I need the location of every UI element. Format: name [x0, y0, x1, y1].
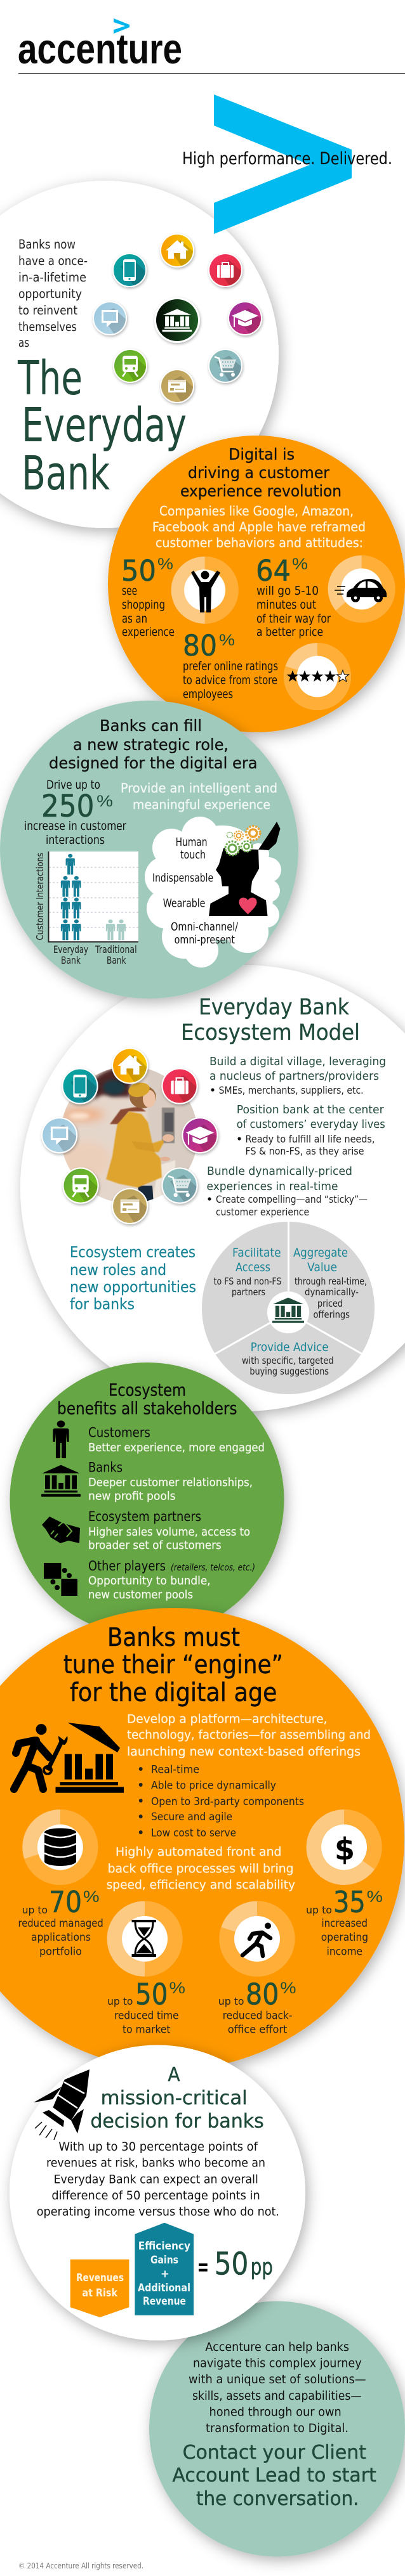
- teal callout: new opportunities: [70, 1278, 196, 1296]
- donut with dollar: [314, 1817, 375, 1877]
- item: ecosystem partners: broader set of customers: [88, 1539, 222, 1552]
- panel: ecosystem benefits: [10, 1362, 284, 1636]
- item: ecosystem partners: Ecosystem partners: [88, 1509, 201, 1524]
- donut with database: [30, 1817, 91, 1877]
- stat 70 percent: reduced managed: [18, 1917, 103, 1929]
- body text: revenues at risk, banks who become an: [46, 2156, 265, 2170]
- main title: Everyday: [22, 398, 187, 453]
- stat 80 percent: 80: [183, 629, 217, 663]
- contact text: Account Lead to start: [172, 2464, 376, 2487]
- item: other players: Other players: [88, 1558, 166, 1574]
- text: position bank at the center: FS & non-FS, as they arise: [245, 1145, 364, 1157]
- body text: transformation to Digital.: [206, 2422, 349, 2435]
- contact text: Contact your Client: [183, 2442, 366, 2464]
- subheading: meaningful experience: [133, 797, 270, 812]
- subheading: [152, 503, 366, 550]
- panel: mission-critical decision: [10, 2045, 305, 2341]
- main title: [17, 351, 187, 501]
- body text: Accenture can help banks: [205, 2341, 349, 2354]
- bullet list: Low cost to serve: [151, 1827, 236, 1839]
- heading: Digital is: [229, 445, 295, 463]
- heading: mission-critical: [101, 2087, 248, 2109]
- facilitate access: to FS and non-FS: [213, 1276, 282, 1287]
- stat 35 percent: increased: [321, 1917, 368, 1929]
- item: banks: Deeper customer relationships,: [88, 1476, 253, 1489]
- stat 50 percent: %: [157, 555, 173, 573]
- heading: for the digital age: [70, 1678, 277, 1707]
- subheading: Companies like Google, Amazon,: [159, 503, 354, 519]
- stat 50 percent: [121, 554, 232, 639]
- item: other players: Opportunity to bundle,: [88, 1574, 211, 1588]
- subheading: automation: Highly automated front and: [116, 1846, 282, 1859]
- box: efficiency gains plus additional revenue: [135, 2223, 194, 2315]
- bullet list: Secure and agile: [151, 1811, 232, 1823]
- icon: rocket: [34, 2069, 90, 2140]
- heading: [49, 716, 258, 772]
- provide advice: [242, 1340, 334, 1377]
- panel: contact call to action: [149, 2301, 405, 2556]
- heart: [239, 898, 257, 914]
- heading: [57, 1381, 237, 1419]
- intro text: Banks now: [18, 237, 76, 252]
- subheading: automation: back office processes will bring: [108, 1863, 294, 1875]
- stat 35 percent: income: [327, 1945, 362, 1957]
- stat 50 percent: 50: [121, 554, 156, 588]
- stat 64 percent: 64: [256, 554, 291, 588]
- text: position bank at the center: of customers’ everyday lives: [237, 1118, 385, 1131]
- heading: Ecosystem: [109, 1381, 186, 1401]
- main title: Bank: [22, 446, 110, 501]
- stat 70 percent: portfolio: [39, 1945, 82, 1957]
- text: position bank at the center: Position bank at the center: [237, 1103, 384, 1116]
- item: ecosystem partners: [42, 1509, 250, 1552]
- text: position bank at the center: [237, 1103, 385, 1157]
- stat 50 percent: %: [169, 1979, 185, 1997]
- subheading: customer behaviors and attitudes:: [156, 535, 363, 550]
- panel: digital revolution: [108, 436, 405, 732]
- stat 80 percent: up to: [218, 1995, 244, 2007]
- donut with car: [335, 562, 388, 616]
- item: other players: new customer pools: [88, 1588, 193, 1602]
- intro text: in-a-lifetime: [18, 270, 86, 285]
- heading: experience revolution: [180, 482, 342, 500]
- category labels: Everyday: [53, 943, 88, 955]
- stat 80 percent: 80: [246, 1977, 279, 2011]
- aggregate value: through real-time,: [295, 1276, 367, 1287]
- stat 64 percent: of their way for: [256, 612, 331, 626]
- stat 50 percent: 50: [135, 1977, 168, 2011]
- text: bundle experiences: experiences in real-time: [207, 1180, 338, 1193]
- box: efficiency gains plus additional revenue: Additional: [138, 2282, 190, 2294]
- stat 50 percent: up to: [107, 1995, 133, 2007]
- teal callout: [70, 1243, 196, 1313]
- stat 35 percent: [306, 1817, 383, 1957]
- body text: skills, assets and capabilities—: [192, 2390, 362, 2403]
- donut with hourglass: [114, 1908, 175, 1969]
- category labels: Bank: [107, 954, 126, 966]
- donut with person: [178, 563, 232, 617]
- donut with stars: [287, 649, 349, 704]
- stat 80 percent: prefer online ratings: [183, 659, 278, 673]
- category labels: Traditional: [95, 943, 137, 955]
- intro text: have a once-: [18, 254, 88, 268]
- teal callout: for banks: [70, 1295, 135, 1313]
- text: build a digital village: SMEs, merchants, suppliers, etc.: [219, 1084, 364, 1096]
- intro text: opportunity: [18, 287, 82, 301]
- box: revenues at risk: at Risk: [82, 2287, 118, 2299]
- subheading: platform: Develop a platform—architecture,: [127, 1713, 328, 1726]
- stat 250 percent: [24, 778, 126, 847]
- text: build a digital village: Build a digital village, leveraging: [209, 1055, 386, 1068]
- heading: tune their “engine”: [63, 1650, 283, 1680]
- aggregate value: priced: [317, 1298, 343, 1309]
- heading: Banks can fill: [100, 716, 202, 735]
- stat 250 percent: %: [96, 793, 113, 810]
- stat 50 percent: to market: [123, 2024, 171, 2035]
- stat 35 percent: up to: [306, 1904, 332, 1916]
- contact text: [172, 2442, 376, 2510]
- panel: new strategic role: [0, 701, 298, 999]
- subheading: platform: technology, factories—for assembling and: [127, 1729, 371, 1742]
- main title: The: [17, 351, 83, 406]
- photo: woman at ATM: [63, 1069, 196, 1201]
- accenture logo: accenture: [18, 25, 182, 73]
- heading: driving a customer: [188, 463, 330, 482]
- item: ecosystem partners: Higher sales volume, access to: [88, 1525, 250, 1539]
- cloud labels: omni-present: [175, 934, 235, 947]
- ring of icons: [41, 1047, 220, 1226]
- cloud labels: Human: [176, 836, 208, 849]
- stat 70 percent: applications: [31, 1931, 91, 1943]
- stat 250 percent: increase in customer: [24, 819, 126, 833]
- teal callout: Ecosystem creates: [70, 1243, 196, 1261]
- box: efficiency gains plus additional revenue: Efficiency: [138, 2240, 190, 2252]
- box: revenues at risk: Revenues: [76, 2272, 124, 2284]
- body text: difference of 50 percentage points in: [51, 2189, 260, 2203]
- item: customers: Customers: [88, 1425, 150, 1440]
- body text: navigate this complex journey: [193, 2357, 362, 2371]
- stat 50 percent: experience: [122, 625, 175, 639]
- text: bundle experiences: Bundle dynamically-priced: [207, 1165, 352, 1178]
- body text: [189, 2341, 366, 2435]
- text: bundle experiences: customer experience: [216, 1206, 309, 1218]
- facilitate access: partners: [232, 1286, 265, 1298]
- text: build a digital village: a nucleus of partners/providers: [209, 1070, 379, 1083]
- item: customers: [53, 1420, 265, 1458]
- aggregate value: dynamically-: [305, 1286, 359, 1298]
- stat 70 percent: up to: [22, 1904, 48, 1916]
- item: other players: [44, 1558, 255, 1602]
- stat 35 percent: operating: [321, 1931, 368, 1943]
- text: build a digital village: [209, 1055, 386, 1096]
- stat 64 percent: [256, 554, 388, 639]
- donut with walker: [227, 1908, 288, 1969]
- icon cluster: [93, 233, 264, 405]
- heading: [181, 995, 360, 1045]
- box: revenues at risk: [70, 2260, 129, 2317]
- stat 80 percent: [218, 1908, 296, 2035]
- stat 70 percent: %: [83, 1888, 100, 1906]
- stat 250 percent: Drive up to: [46, 778, 100, 792]
- bullet list: Real-time: [151, 1764, 199, 1775]
- item: banks: Banks: [88, 1460, 123, 1475]
- subheading: platform: launching new context-based offerings: [127, 1745, 361, 1759]
- result: 50pp: pp: [251, 2255, 273, 2281]
- donut with dollar: $: [335, 1832, 355, 1867]
- heading: [90, 2064, 264, 2133]
- stat 64 percent: minutes out: [256, 598, 316, 612]
- category labels: [53, 943, 137, 966]
- body text: with a unique set of solutions—: [189, 2373, 366, 2386]
- subheading: Facebook and Apple have reframed: [152, 519, 366, 534]
- thought cloud with head: [145, 817, 281, 968]
- stat 50 percent: as an: [122, 612, 147, 626]
- subheading: platform: [127, 1713, 371, 1759]
- box: efficiency gains plus additional revenue: Gains: [150, 2254, 178, 2266]
- stat 64 percent: %: [292, 555, 308, 573]
- heading: Banks must: [107, 1623, 240, 1652]
- cloud labels: Wearable: [163, 898, 205, 910]
- stat 50 percent: shopping: [122, 598, 165, 612]
- teal callout: new roles and: [70, 1261, 166, 1279]
- text: bundle experiences: [207, 1165, 368, 1218]
- box: efficiency gains plus additional revenue: Revenue: [143, 2295, 186, 2307]
- head silhouette: [209, 848, 268, 916]
- provide advice: with specific, targeted: [242, 1355, 334, 1366]
- facilitate access: Access: [236, 1260, 270, 1274]
- stat 80 percent: %: [280, 1979, 296, 1997]
- bank icon: [272, 1298, 304, 1323]
- aggregate value: Aggregate: [293, 1246, 348, 1260]
- heading: designed for the digital era: [49, 754, 258, 772]
- aggregate value: Value: [307, 1260, 337, 1274]
- contact text: the conversation.: [196, 2488, 359, 2510]
- result: 50pp: [199, 2246, 273, 2282]
- item: banks: [41, 1460, 253, 1503]
- aggregate value: [293, 1246, 367, 1320]
- box: efficiency gains plus additional revenue: +: [161, 2268, 169, 2280]
- stat 80 percent: reduced back-: [223, 2009, 293, 2021]
- stat 50 percent: see: [122, 584, 137, 598]
- stat 50 percent: [107, 1908, 185, 2035]
- stat 35 percent: 35: [333, 1885, 366, 1919]
- heading: A: [168, 2064, 180, 2086]
- stat 80 percent: employees: [183, 687, 233, 701]
- stat 80 percent: to advice from store: [183, 673, 277, 687]
- intro text: as: [18, 335, 29, 350]
- text: bundle experiences: Create compelling—and “sticky”—: [216, 1193, 368, 1205]
- body text: Everyday Bank can expect an overall: [54, 2172, 258, 2186]
- subheading: automation: speed, efficiency and scalability: [107, 1879, 295, 1892]
- facilitate access: [213, 1246, 282, 1298]
- stat 250 percent: 250: [41, 789, 94, 824]
- intro text: [18, 237, 88, 350]
- pictogram chart: [34, 851, 138, 966]
- item: banks: new profit pools: [88, 1490, 176, 1503]
- heading: benefits all stakeholders: [57, 1399, 237, 1419]
- text: position bank at the center: Ready to fulfill all life needs,: [245, 1133, 375, 1145]
- stat 80 percent: office effort: [228, 2024, 288, 2035]
- provide advice: Provide Advice: [251, 1340, 329, 1354]
- pie diagram: bank roles: [202, 1220, 375, 1394]
- stat 50 percent: reduced time: [114, 2009, 179, 2021]
- cloud labels: touch: [180, 849, 206, 862]
- aggregate value: offerings: [314, 1309, 350, 1320]
- stat 80 percent: %: [219, 631, 235, 649]
- bullet list: Open to 3rd-party components: [151, 1796, 304, 1808]
- big chevron: [214, 94, 352, 234]
- item: other players: (retailers, telcos, etc.): [171, 1563, 255, 1573]
- bullet list: Able to price dynamically: [151, 1780, 276, 1792]
- facilitate access: Facilitate: [232, 1246, 281, 1260]
- body text: [37, 2140, 279, 2219]
- icon: mechanic and bank: [14, 1723, 124, 1793]
- cloud labels: Omni-channel/: [171, 921, 238, 934]
- cloud labels: Indispensable: [152, 872, 213, 885]
- body text: honed through our own: [209, 2405, 342, 2419]
- subheading: Provide an intelligent and: [121, 780, 277, 796]
- panel: tune the engine: [0, 1608, 404, 2069]
- item: customers: Better experience, more engaged: [88, 1441, 265, 1454]
- heading: [63, 1623, 283, 1707]
- heading: Everyday Bank: [199, 995, 350, 1020]
- subheading: [121, 780, 277, 812]
- body text: operating income versus those who do not.: [37, 2205, 279, 2219]
- category labels: Bank: [61, 954, 81, 966]
- stat 80 percent: [183, 629, 349, 704]
- panel: the everyday bank intro circle: [0, 181, 279, 528]
- gears: [225, 826, 260, 855]
- subheading: automation: [107, 1846, 295, 1892]
- result: 50pp: 50: [215, 2246, 248, 2282]
- panel: header: [18, 18, 405, 74]
- provide advice: buying suggestions: [249, 1366, 329, 1377]
- bullet list: [139, 1764, 304, 1839]
- heading: a new strategic role,: [73, 735, 229, 754]
- stat 250 percent: interactions: [46, 833, 105, 847]
- heading: [180, 445, 342, 500]
- cloud labels: [152, 836, 238, 947]
- intro text: to reinvent: [18, 303, 77, 318]
- heading: decision for banks: [90, 2111, 264, 2133]
- stat 70 percent: 70: [49, 1885, 82, 1919]
- stat 64 percent: a better price: [256, 625, 323, 639]
- copyright: © 2014 Accenture All rights reserved.: [18, 2561, 143, 2570]
- stat 35 percent: %: [367, 1888, 383, 1906]
- panel: everyday bank ecosystem model: [20, 965, 405, 1411]
- axis label: Customer Interactions: [34, 853, 46, 940]
- intro text: themselves: [18, 320, 77, 334]
- heading: Ecosystem Model: [181, 1020, 360, 1045]
- stat 64 percent: will go 5-10: [256, 584, 319, 598]
- stat 70 percent: [18, 1817, 103, 1957]
- body text: With up to 30 percentage points of: [58, 2140, 258, 2154]
